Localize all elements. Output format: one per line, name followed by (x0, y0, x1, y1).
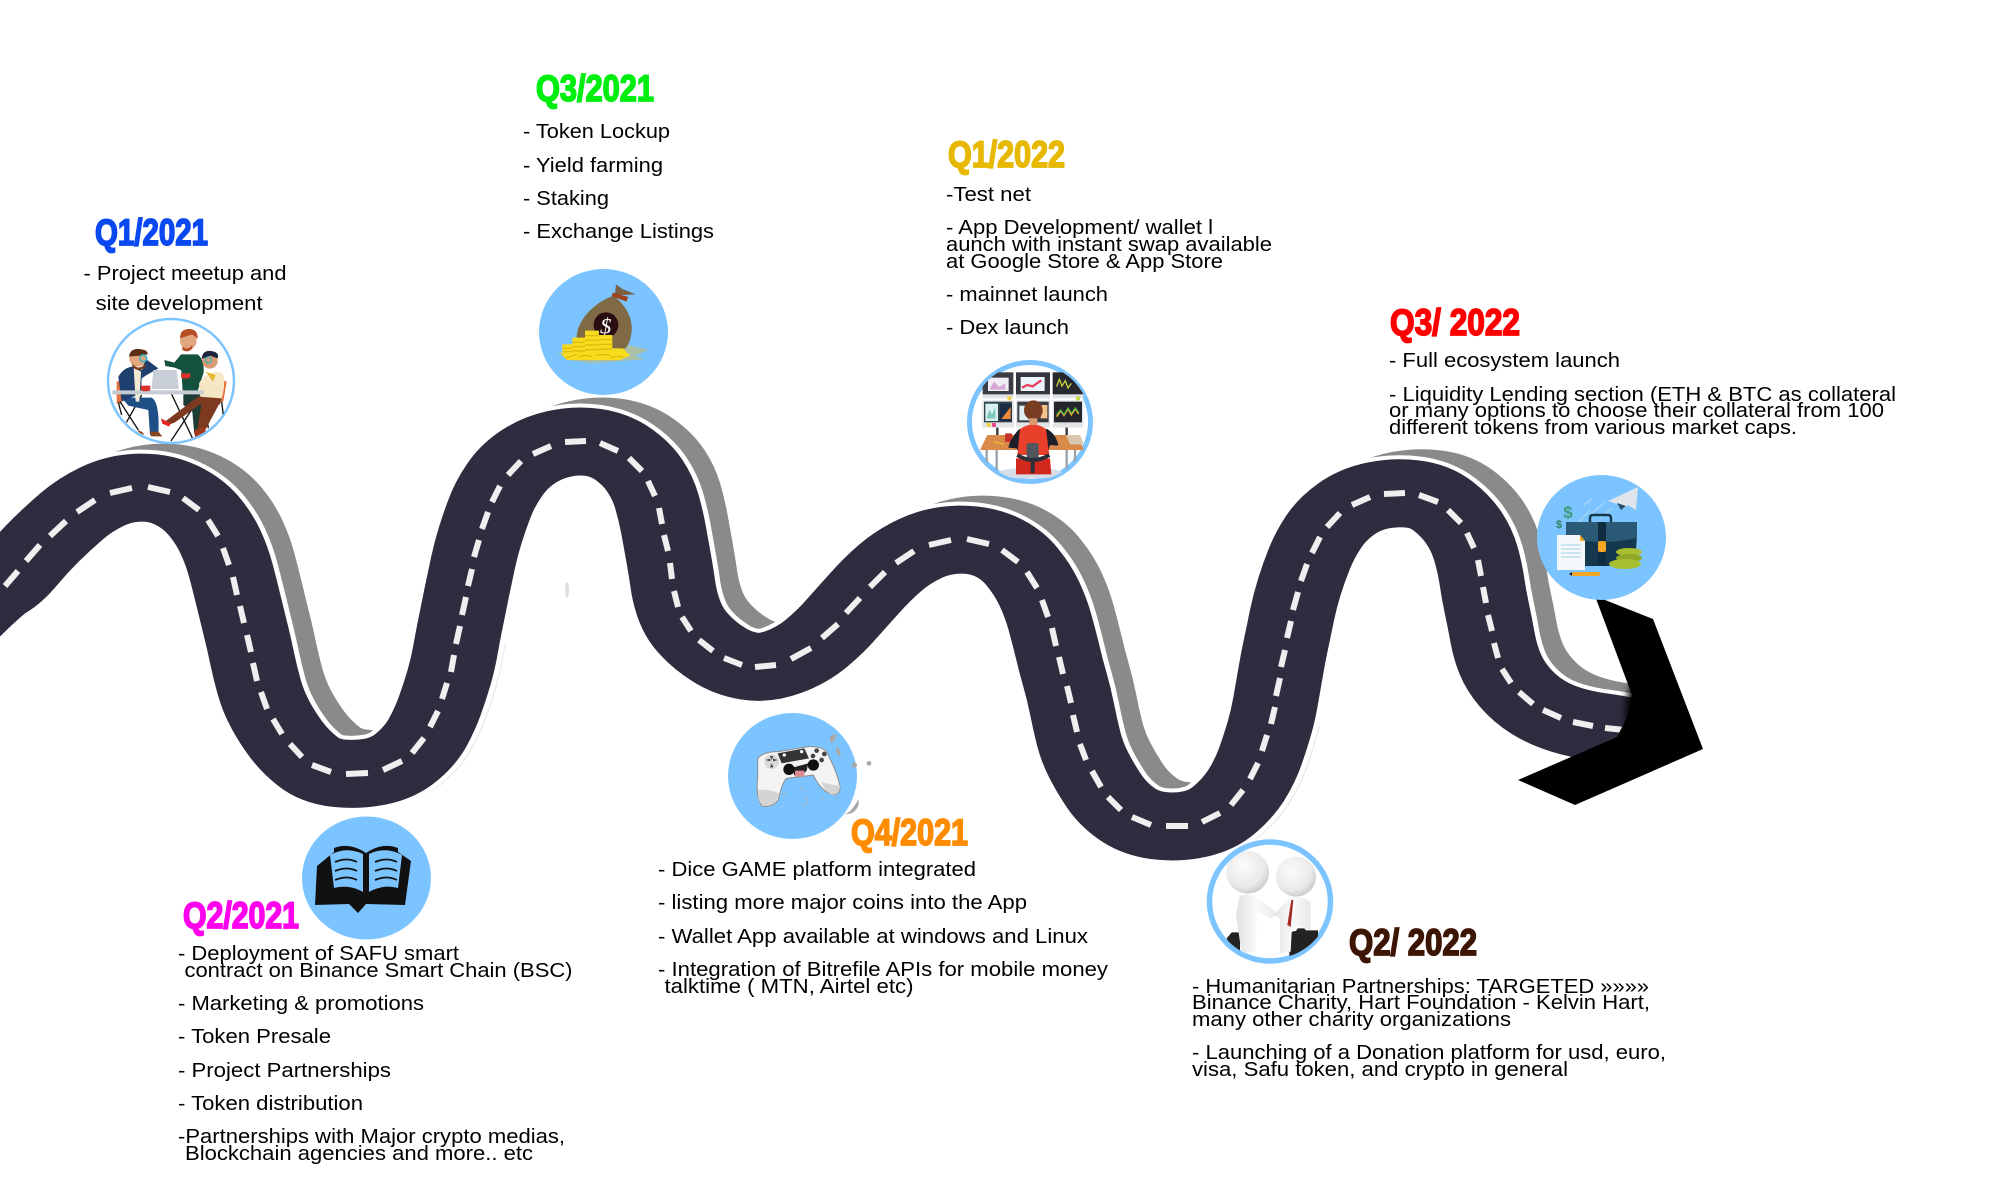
Q2/2022 heading and text: - Launching of a Donation platform for usd, euro, (1192, 1041, 1666, 1064)
Q2/2022 heading and text: many other charity organizations (1192, 1008, 1511, 1031)
Q1/2022 heading and text (946, 134, 1272, 339)
icon: money bag with coins: $ (600, 313, 611, 338)
Q4/2021 heading and text: - Wallet App available at windows and Linux (658, 925, 1089, 948)
Q2/2021 heading and text: - Project Partnerships (178, 1059, 391, 1082)
Q2/2021 heading and text: - Deployment of SAFU smart (178, 942, 459, 965)
Q3/2022 heading and text: - Liquidity Lending section (ETH & BTC as collateral (1389, 383, 1896, 406)
Q2/2021 heading and text (178, 895, 572, 1165)
Q1/2022 heading and text: - Dex launch (946, 316, 1069, 339)
icon: game controller (728, 713, 871, 839)
Q2/2022 heading and text: - Humanitarian Partnerships: TARGETED »»»» (1192, 975, 1649, 998)
Q4/2021 heading and text (658, 812, 1109, 998)
Q2/2021 heading and text: contract on Binance Smart Chain (BSC) (184, 959, 572, 982)
Q3/2022 heading and text: different tokens from various market caps. (1389, 416, 1797, 439)
Q1/2022 heading and text: - mainnet launch (946, 283, 1108, 306)
Q1/2022 heading and text: aunch with instant swap available (946, 233, 1272, 256)
Q3/2021 heading and text: - Token Lockup (523, 120, 670, 143)
Q3/2022 heading and text: or many options to choose their collateral from 100 (1389, 399, 1884, 422)
icon: handshake figures (1210, 842, 1330, 961)
Q1/2022 heading and text: -Test net (946, 183, 1031, 206)
Q4/2021 heading and text: Q4/2021 (851, 812, 968, 853)
Q2/2021 heading and text: - Marketing & promotions (178, 992, 424, 1015)
Q3/2022 heading and text: - Full ecosystem launch (1389, 349, 1620, 372)
icon: money bag with coins (539, 269, 668, 395)
Q1/2021 heading and text: Q1/2021 (95, 212, 208, 253)
Q1/2022 heading and text: at Google Store & App Store (946, 250, 1223, 273)
Q1/2021 heading and text (84, 212, 286, 315)
icon: trader at monitors (970, 362, 1090, 482)
Q3/2021 heading and text (523, 68, 714, 243)
Q1/2022 heading and text: Q1/2022 (948, 134, 1065, 175)
Q4/2021 heading and text: talktime ( MTN, Airtel etc) (664, 975, 914, 998)
Q2/2022 heading and text (1192, 922, 1666, 1081)
arrow head at the end of the road (1518, 596, 1703, 805)
Q1/2021 heading and text: site development (96, 292, 263, 315)
Q3/2021 heading and text: Q3/2021 (536, 68, 654, 109)
Q4/2021 heading and text: - Integration of Bitrefile APIs for mobile money (658, 958, 1109, 981)
road with gray shoulder and dashed centre line (0, 432, 1640, 830)
Q3/2021 heading and text: - Yield farming (523, 154, 663, 177)
Q4/2021 heading and text: - listing more major coins into the App (658, 891, 1027, 914)
Q2/2021 heading and text: Blockchain agencies and more.. etc (185, 1142, 533, 1165)
Q2/2022 heading and text: Q2/ 2022 (1349, 922, 1477, 963)
Q2/2021 heading and text: - Token Presale (178, 1025, 331, 1048)
icon: briefcase with plane and coins: $ (1556, 519, 1562, 531)
icon: team meeting (108, 319, 234, 443)
Q4/2021 heading and text: - Dice GAME platform integrated (658, 858, 976, 881)
Q2/2021 heading and text: - Token distribution (178, 1092, 363, 1115)
Q1/2021 heading and text: - Project meetup and (84, 262, 286, 285)
icon: open book (302, 816, 431, 940)
Q2/2021 heading and text: -Partnerships with Major crypto medias, (178, 1125, 565, 1148)
Q1/2022 heading and text: - App Development/ wallet l (946, 216, 1213, 239)
Q2/2022 heading and text: visa, Safu token, and crypto in general (1192, 1058, 1568, 1081)
Q3/2022 heading and text: Q3/ 2022 (1390, 302, 1520, 343)
icon: briefcase with plane and coins (1537, 475, 1666, 600)
Q2/2021 heading and text: Q2/2021 (183, 895, 299, 936)
Q3/2021 heading and text: - Exchange Listings (523, 220, 714, 243)
Q2/2022 heading and text: Binance Charity, Hart Foundation - Kelvin Hart, (1192, 991, 1650, 1014)
Q3/2022 heading and text (1389, 302, 1896, 439)
Q3/2021 heading and text: - Staking (523, 187, 609, 210)
icon: briefcase with plane and coins: $ (1563, 503, 1573, 522)
